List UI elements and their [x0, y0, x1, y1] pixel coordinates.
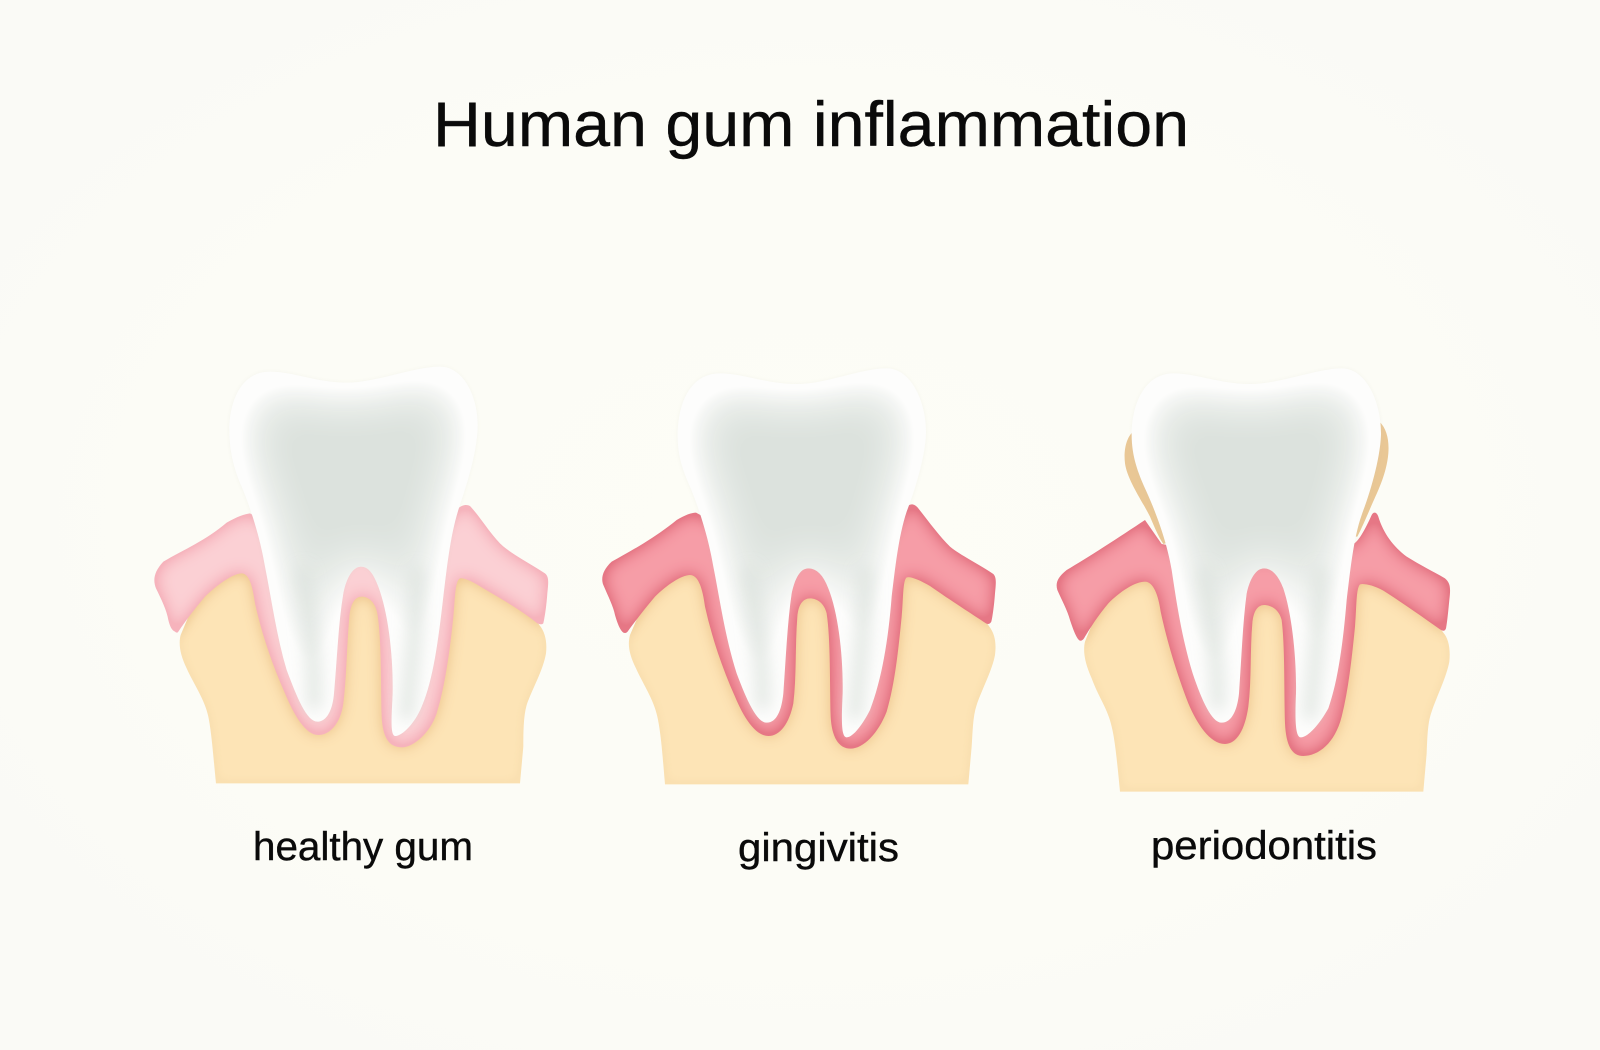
title: Human gum inflammation: [433, 90, 1189, 160]
illustration: tooth with plaque and receded gum: [1057, 368, 1450, 792]
gum tissue, inflamed: [602, 504, 996, 749]
jaw bone: [180, 567, 546, 783]
tooth root shading: [1205, 573, 1320, 713]
tooth: [229, 367, 478, 736]
panel: healthy gum: [154, 367, 548, 869]
label: gingivitis: gingivitis: [738, 826, 899, 870]
panel: periodontitis: [1057, 368, 1450, 868]
label: healthy gum: healthy gum: [253, 825, 473, 869]
illustration: healthy tooth: [154, 367, 548, 783]
jaw bone: [1084, 570, 1450, 792]
illustration: tooth with inflamed gum: [602, 368, 996, 784]
tooth: [1132, 368, 1381, 737]
panel: gingivitis: [602, 368, 996, 870]
tooth: [678, 368, 926, 737]
label: periodontitis: periodontitis: [1151, 824, 1377, 868]
gum tissue, pale pink: [154, 505, 548, 747]
plaque deposit, right: [1347, 422, 1389, 537]
gum tissue, inflamed and receded: [1057, 513, 1450, 756]
tooth root shading: [303, 573, 417, 713]
plaque deposit, left: [1125, 432, 1177, 544]
tooth root shading: [750, 573, 865, 713]
jaw bone: [629, 567, 996, 784]
